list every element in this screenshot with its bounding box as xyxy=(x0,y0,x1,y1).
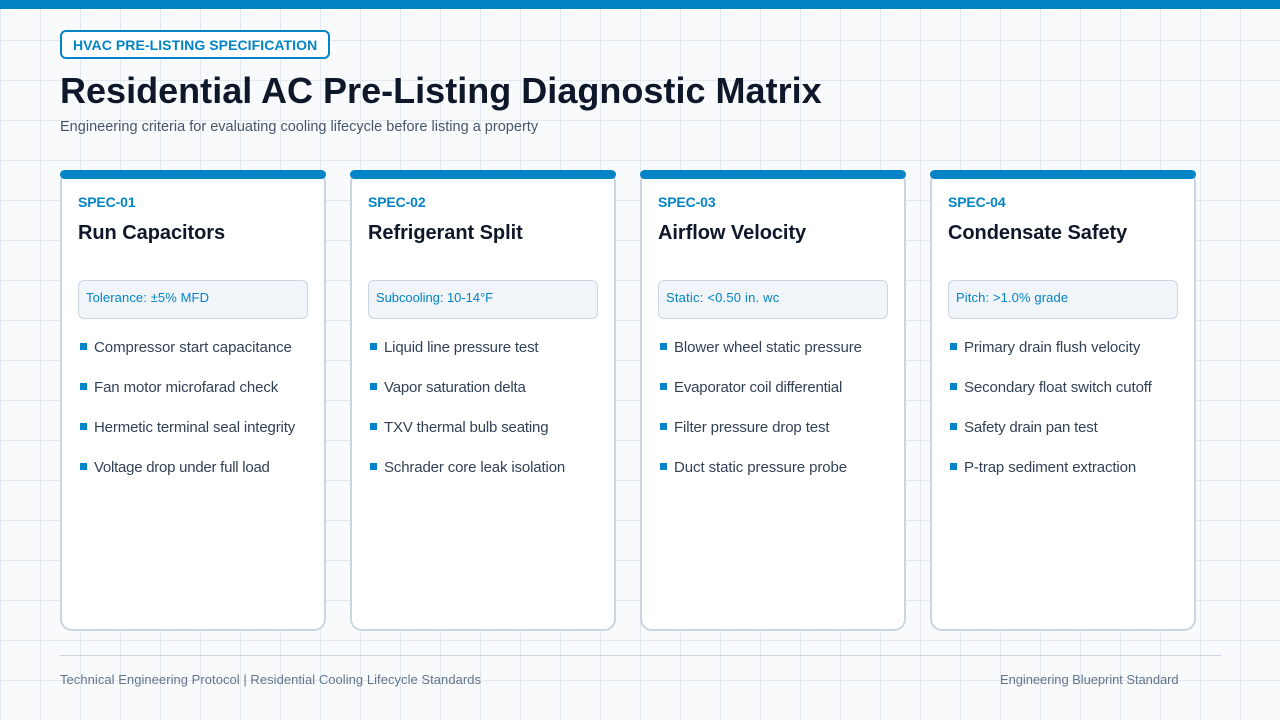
card heading: Condensate Safety xyxy=(948,222,1127,244)
subtitle: Engineering criteria for evaluating cooling lifecycle before listing a property xyxy=(60,119,538,135)
spec label: SPEC-01 xyxy=(78,194,136,210)
list item: Voltage drop under full load xyxy=(94,459,270,476)
footer right text: Engineering Blueprint Standard xyxy=(1000,672,1179,687)
card heading: Run Capacitors xyxy=(78,222,225,244)
list item: P-trap sediment extraction xyxy=(964,459,1136,476)
spec label: SPEC-03 xyxy=(658,194,716,210)
list item: Filter pressure drop test xyxy=(674,419,829,436)
panel: run capacitors xyxy=(60,170,326,631)
card top bar xyxy=(640,170,906,179)
card heading: Refrigerant Split xyxy=(368,222,523,244)
list item: Schrader core leak isolation xyxy=(384,459,565,476)
list item: TXV thermal bulb seating xyxy=(384,419,548,436)
card top bar xyxy=(930,170,1196,179)
badge xyxy=(60,30,330,59)
tolerance metric: Tolerance: ±5% MFD xyxy=(86,290,209,305)
static pressure metric: Static: <0.50 in. wc xyxy=(666,290,779,305)
card heading: Airflow Velocity xyxy=(658,222,806,244)
static pressure metric xyxy=(658,280,888,319)
subcooling metric: Subcooling: 10-14°F xyxy=(376,290,493,305)
list item: Fan motor microfarad check xyxy=(94,379,278,396)
list item: Hermetic terminal seal integrity xyxy=(94,419,295,436)
list item: Blower wheel static pressure xyxy=(674,339,862,356)
title: Residential AC Pre-Listing Diagnostic Matrix xyxy=(60,70,822,111)
panel: refrigerant split xyxy=(350,170,616,631)
list item: Secondary float switch cutoff xyxy=(964,379,1152,396)
list item: Safety drain pan test xyxy=(964,419,1098,436)
spec label: SPEC-04 xyxy=(948,194,1006,210)
card top bar xyxy=(60,170,326,179)
list item: Duct static pressure probe xyxy=(674,459,847,476)
list item: Compressor start capacitance xyxy=(94,339,292,356)
footer left text: Technical Engineering Protocol | Residential Cooling Lifecycle Standards xyxy=(60,672,481,687)
spec label: SPEC-02 xyxy=(368,194,426,210)
pitch metric xyxy=(948,280,1178,319)
list item: Liquid line pressure test xyxy=(384,339,538,356)
subcooling metric xyxy=(368,280,598,319)
pitch metric: Pitch: >1.0% grade xyxy=(956,290,1068,305)
card top bar xyxy=(350,170,616,179)
list item: Primary drain flush velocity xyxy=(964,339,1140,356)
badge: HVAC PRE-LISTING SPECIFICATION xyxy=(73,37,317,53)
list item: Vapor saturation delta xyxy=(384,379,526,396)
top accent bar xyxy=(0,0,1280,9)
tolerance metric xyxy=(78,280,308,319)
panel: condensate safety xyxy=(930,170,1196,631)
panel: airflow velocity xyxy=(640,170,906,631)
list item: Evaporator coil differential xyxy=(674,379,842,396)
